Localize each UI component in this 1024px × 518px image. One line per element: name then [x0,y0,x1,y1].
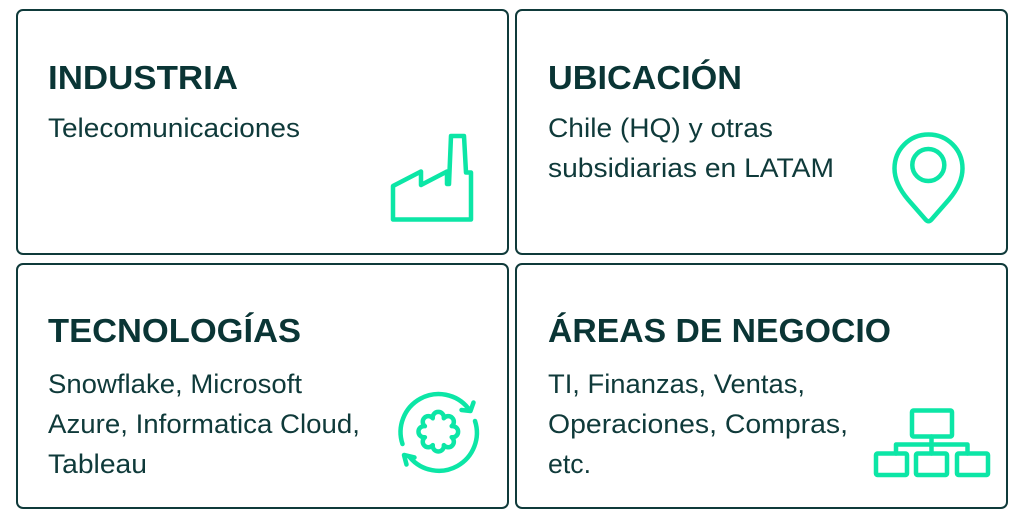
text: ubicacion: Chile (HQ) y otras [548,113,773,143]
text: areas de negocio: Operaciones, Compras, [548,409,848,439]
icon: location pin [894,134,962,221]
text: ubicacion [548,113,834,183]
panel: ubicacion [516,10,1007,254]
icon: factory [393,136,471,220]
text: areas de negocio: TI, Finanzas, Ventas, [548,369,805,399]
text: tecnologias: Azure, Informatica Cloud, [48,409,360,439]
panel: areas de negocio [516,264,1007,508]
icon: org chart [876,410,988,475]
text: industria: Telecomunicaciones [48,113,300,143]
heading: ubicacion: UBICACIÓN [548,59,742,96]
text: tecnologias: Snowflake, Microsoft [48,369,303,399]
text: tecnologias: Tableau [48,449,147,479]
text: tecnologias [48,369,360,479]
heading: tecnologias: TECNOLOGÍAS [48,312,301,349]
panel: industria [17,10,508,254]
text: areas de negocio [548,369,848,479]
heading: industria: INDUSTRIA [48,59,238,96]
heading: areas de negocio: ÁREAS DE NEGOCIO [548,312,891,349]
text: ubicacion: subsidiarias en LATAM [548,153,834,183]
panel: tecnologias [17,264,508,508]
text: areas de negocio: etc. [548,449,591,479]
icon: gear with cycle arrows [401,394,477,471]
